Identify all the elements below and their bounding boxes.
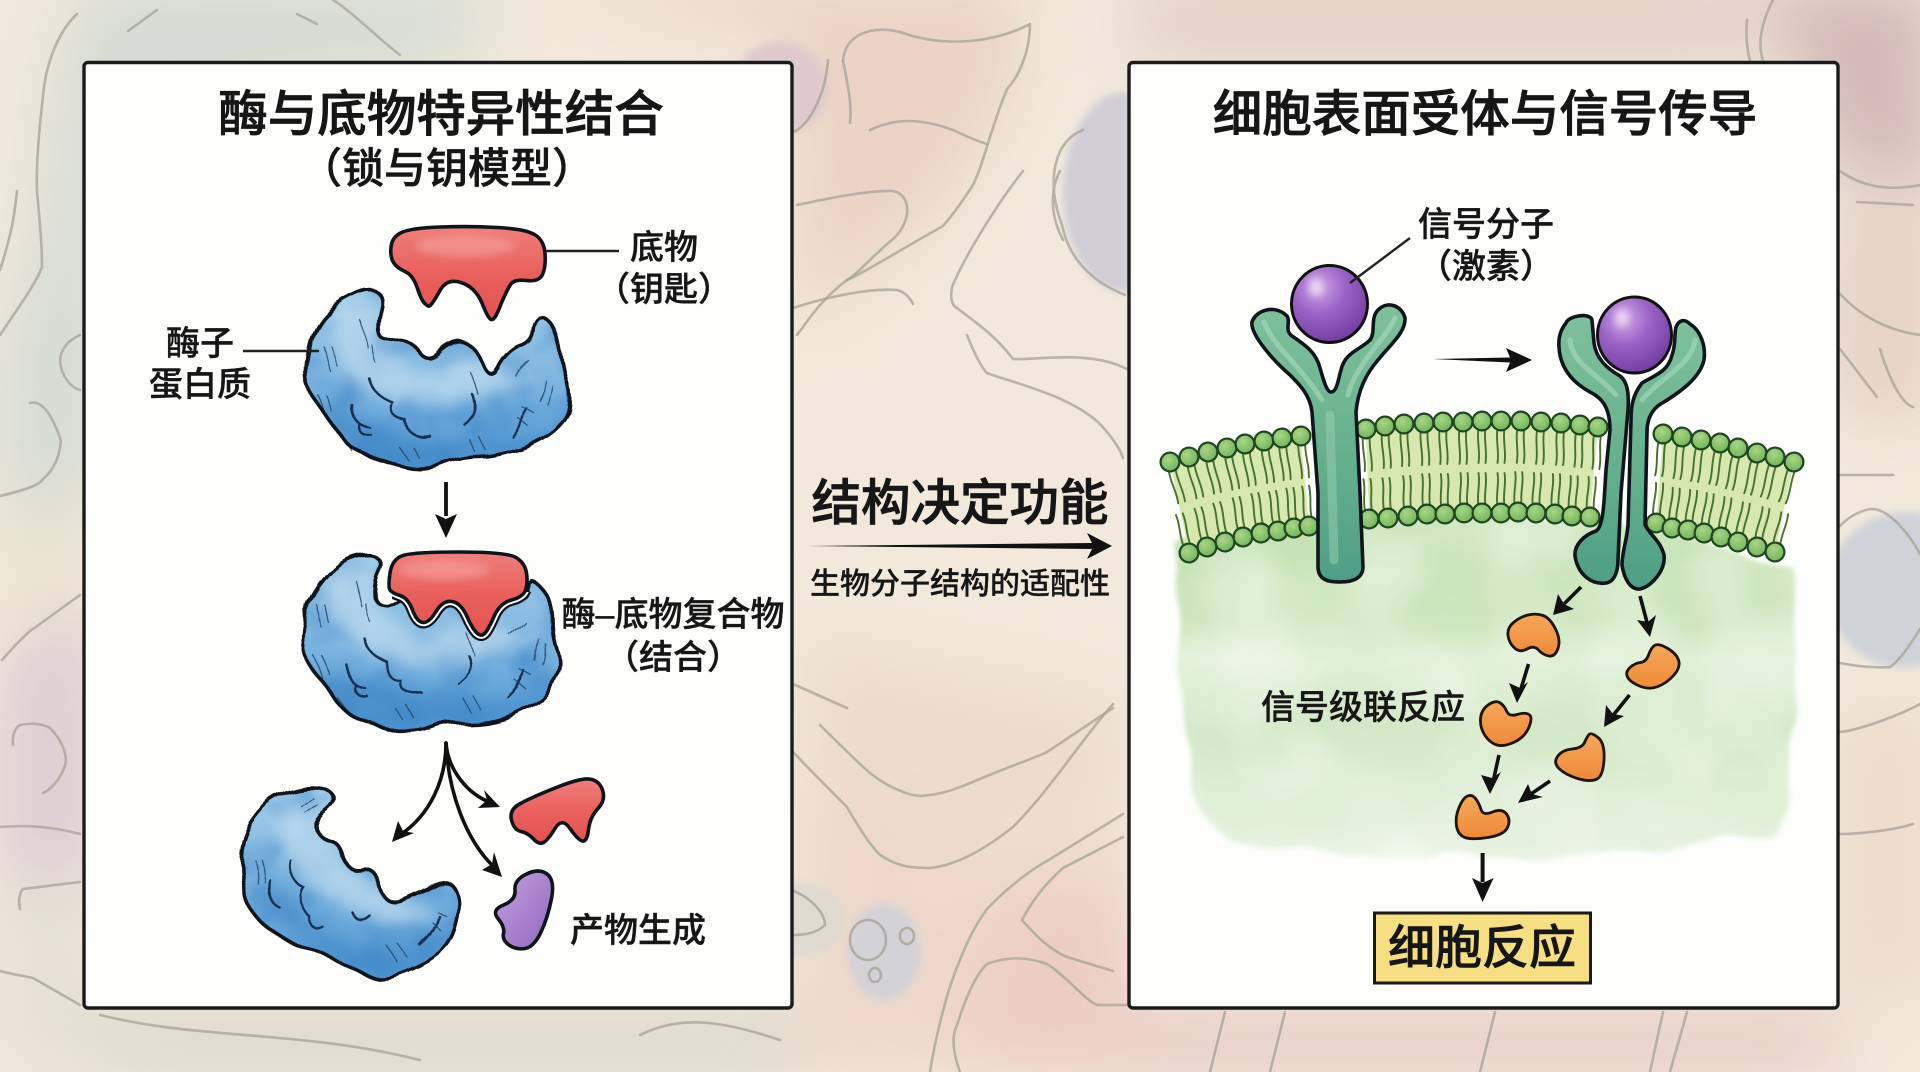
label: key: （钥匙） bbox=[596, 271, 732, 309]
substrate (key) bbox=[391, 227, 545, 320]
enzyme-substrate complex bbox=[302, 552, 565, 735]
label: protein: 蛋白质 bbox=[149, 366, 251, 404]
signal molecule bound bbox=[1598, 297, 1672, 373]
label: signal molecule: 信号分子 bbox=[1418, 206, 1554, 244]
arrow: to cell response bbox=[1472, 853, 1494, 902]
subtitle: lock and key model: （锁与钥模型） bbox=[300, 145, 594, 192]
title: receptor signalling: 细胞表面受体与信号传导 bbox=[1213, 87, 1757, 142]
arrow: binding bbox=[435, 482, 457, 538]
label: hormone: （激素） bbox=[1418, 248, 1554, 286]
label: products formed: 产物生成 bbox=[570, 912, 706, 950]
active dimer receptor bbox=[1559, 316, 1704, 589]
heading: 结构决定功能 bbox=[812, 476, 1108, 531]
leader line: enzyme bbox=[243, 350, 319, 352]
kinase cascade molecules bbox=[1456, 614, 1679, 839]
box: cell response: 细胞反应 bbox=[1388, 921, 1576, 974]
label: signal cascade: 信号级联反应 bbox=[1261, 689, 1465, 727]
enzyme protein bbox=[306, 290, 570, 470]
box: cell response bbox=[1374, 913, 1590, 983]
released substrate bbox=[511, 779, 604, 843]
caption: 生物分子结构的适配性 bbox=[810, 568, 1110, 601]
cytoplasm watercolor wash bbox=[1176, 516, 1796, 858]
label: enzyme: 酶子 bbox=[166, 325, 234, 363]
panel: enzyme-substrate binding bbox=[84, 62, 792, 1008]
label: binding: （结合） bbox=[605, 639, 741, 677]
leader line: substrate bbox=[546, 250, 619, 252]
product molecule bbox=[495, 871, 553, 949]
signal molecule unbound bbox=[1292, 266, 1368, 342]
released enzyme bbox=[241, 788, 460, 978]
center: structure determines function bbox=[808, 476, 1112, 601]
title: enzyme substrate specificity: 酶与底物特异性结合 bbox=[218, 87, 664, 142]
label: enzyme-substrate complex: 酶–底物复合物 bbox=[562, 596, 784, 634]
cascade arrows bbox=[1481, 587, 1656, 803]
panel frame bbox=[1129, 62, 1838, 1008]
panel frame bbox=[84, 62, 792, 1008]
panel: receptor signal transduction bbox=[1129, 62, 1838, 1008]
label: substrate: 底物 bbox=[630, 229, 698, 267]
arrow: toward receptor panel bbox=[808, 533, 1112, 559]
cell membrane bilayer bbox=[1158, 411, 1806, 564]
inactive Y receptor bbox=[1252, 305, 1405, 582]
branching product arrows bbox=[392, 743, 502, 877]
arrow: activation bbox=[1433, 348, 1532, 372]
leader line: signal molecule bbox=[1350, 238, 1410, 283]
